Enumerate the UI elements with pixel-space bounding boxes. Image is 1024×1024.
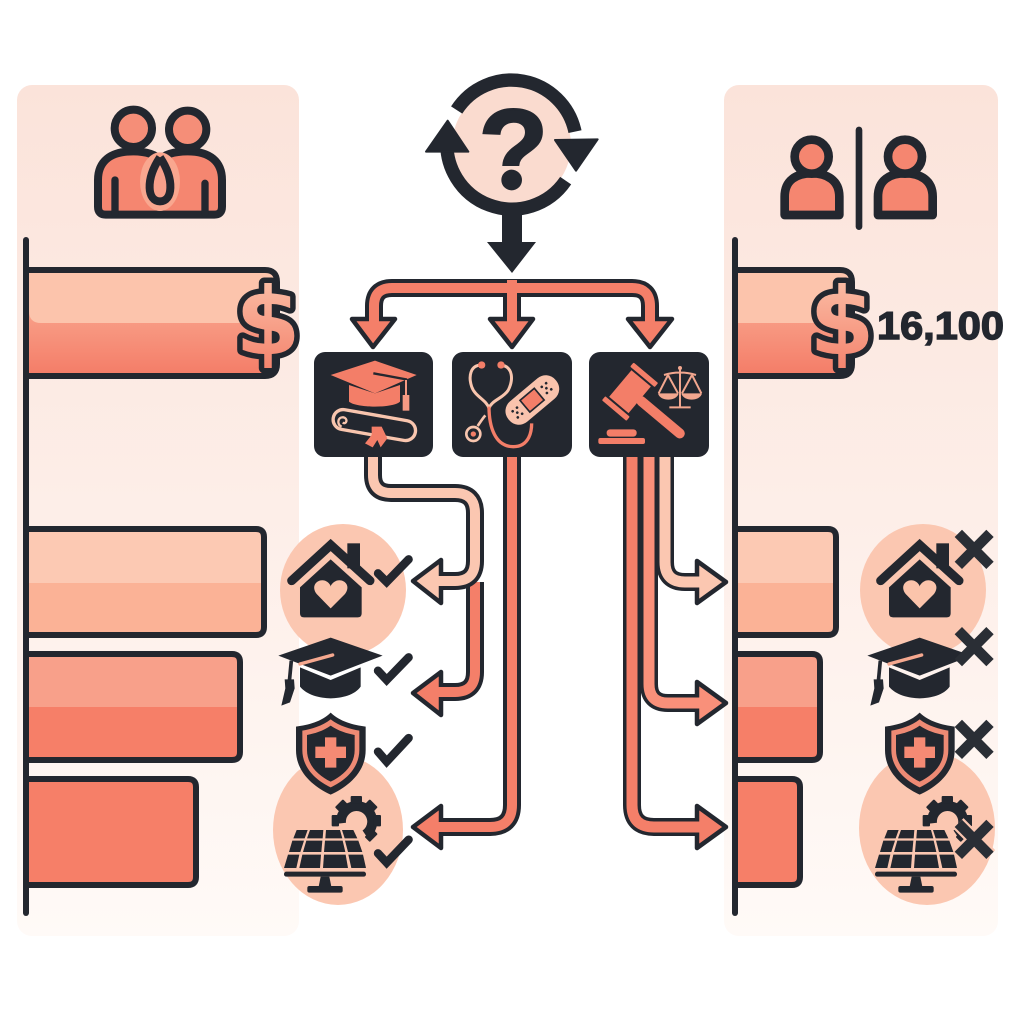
icon: house bbox=[881, 543, 959, 617]
axis: left bbox=[23, 240, 29, 913]
ellipse backgrounds: right icons bbox=[859, 524, 995, 905]
bar: left third bbox=[26, 654, 240, 760]
connector: legal to right solar bbox=[632, 457, 726, 848]
box: healthcare bbox=[452, 352, 572, 457]
icon: shield bbox=[885, 713, 955, 795]
icon: left dollar sign: $ bbox=[235, 268, 301, 377]
panel: right background bbox=[724, 85, 998, 936]
connector: legal to right cap bbox=[649, 457, 726, 724]
icon: graduation cap bbox=[278, 638, 383, 706]
connector: healthcare to left solar bbox=[413, 457, 512, 848]
ellipse backgrounds: left icons bbox=[273, 524, 406, 905]
bar chart: left panel bbox=[26, 240, 277, 913]
arrows: branch to three categories bbox=[352, 280, 672, 347]
panel: left background bbox=[17, 85, 299, 936]
bar: left top bbox=[26, 270, 277, 376]
icon: house bbox=[292, 543, 370, 617]
cross marks bbox=[958, 533, 990, 855]
icon: two separate people bbox=[785, 130, 933, 227]
value label: 16,100: 16,100 bbox=[877, 305, 1004, 348]
check marks bbox=[378, 559, 409, 863]
axis: right bbox=[732, 240, 738, 913]
icon: solar panel and gear bbox=[284, 796, 381, 893]
bar: left fourth bbox=[26, 779, 196, 885]
icon: right dollar sign: $ bbox=[809, 268, 875, 377]
bar: left second bbox=[26, 529, 264, 635]
box: education bbox=[314, 352, 433, 457]
bar: right fourth bbox=[735, 779, 800, 885]
bar: right top bbox=[735, 270, 852, 376]
icons: right benefits bbox=[867, 543, 972, 893]
icons: left benefits with check marks bbox=[278, 543, 409, 893]
bar: right second bbox=[735, 529, 836, 635]
icon: graduation cap bbox=[867, 638, 972, 706]
icon: joined couple bbox=[98, 110, 222, 215]
icon: question mark in circular arrows bbox=[426, 80, 598, 214]
bar: right third bbox=[735, 654, 820, 760]
connector: education to left house bbox=[373, 457, 475, 603]
icon: solar panel and gear bbox=[875, 796, 972, 893]
arrow: dark stem down bbox=[487, 213, 536, 273]
icon: shield bbox=[296, 713, 366, 795]
connector: legal to right house bbox=[665, 457, 726, 603]
box: legal bbox=[589, 352, 709, 457]
bar chart: right panel bbox=[735, 240, 852, 913]
icon: question mark in circular arrows: ? bbox=[478, 86, 548, 214]
connector: education to left cap bbox=[413, 582, 475, 715]
